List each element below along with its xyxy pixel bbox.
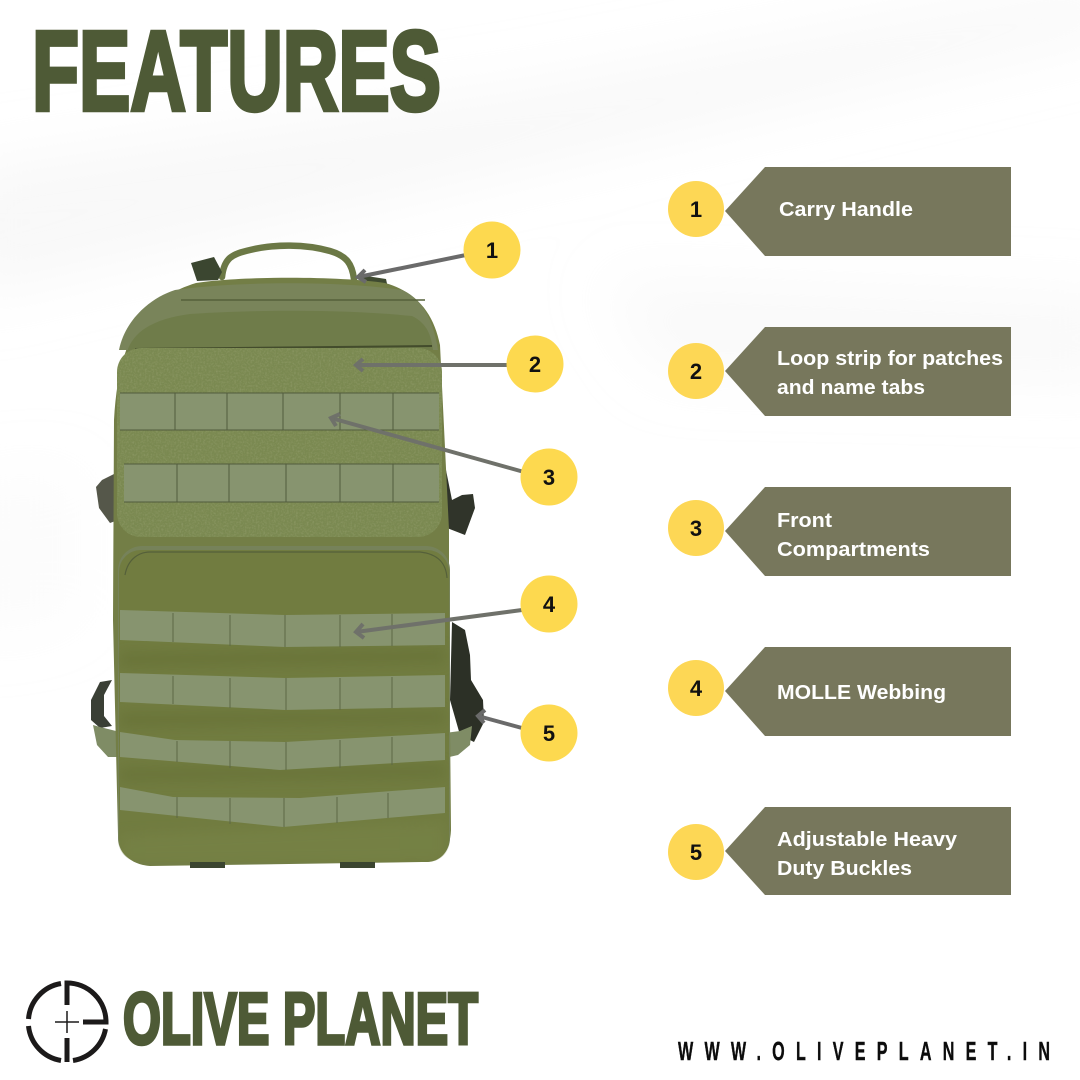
side buckles and straps [91, 470, 484, 758]
marker 1 on backpack: 1 [486, 238, 498, 263]
marker 2 on backpack [506, 336, 564, 392]
marker 5 on backpack: 5 [543, 721, 555, 746]
feature 1: carry handle: 1 [690, 197, 702, 222]
feature 2: loop strip: and name tabs [777, 377, 925, 399]
feature 5: buckles: 5 [690, 840, 702, 865]
website url: WWW.OLIVEPLANET.IN [678, 1036, 1050, 1066]
title: FEATURES [32, 8, 441, 134]
feature 2: loop strip [668, 327, 1011, 416]
feature 2: loop strip: Loop strip for patches [777, 348, 1003, 370]
MOLLE webbing strips [120, 610, 445, 827]
arrow 4 [356, 610, 522, 638]
marker 5 on backpack [520, 704, 578, 762]
feature 5: buckles: Adjustable Heavy [777, 829, 958, 851]
top compartment [119, 283, 438, 352]
arrow 3 [331, 414, 524, 472]
lower webbing row [124, 464, 439, 502]
feature 4: MOLLE webbing: 4 [690, 676, 703, 701]
feature 5: buckles: Duty Buckles [777, 858, 912, 880]
logo icon: crosshair [28, 983, 106, 1062]
feature 4: MOLLE webbing [668, 647, 1011, 736]
feature 1: carry handle: Carry Handle [779, 199, 913, 221]
upper webbing row [120, 393, 439, 430]
backpack body [113, 278, 451, 866]
feature 3: front compartments: Front [777, 510, 832, 532]
marker 4 on backpack [520, 576, 578, 632]
feature 2: loop strip: 2 [690, 359, 702, 384]
marker 2 on backpack: 2 [529, 352, 541, 377]
arrow 5 [478, 710, 522, 728]
front loop panel [117, 348, 442, 537]
marker 4 on backpack: 4 [543, 592, 556, 617]
logo wordmark: OLIVE PLANET [123, 979, 478, 1060]
feature 4: MOLLE webbing: MOLLE Webbing [777, 682, 946, 704]
arrow 1 [358, 255, 466, 282]
marker 3 on backpack [520, 448, 578, 506]
backpack illustration [91, 246, 484, 868]
feature 1: carry handle [668, 167, 1011, 256]
lower compartment [118, 546, 450, 868]
bottom feet [190, 862, 375, 868]
arrow 2 [356, 359, 507, 371]
feature 3: front compartments: Compartments [777, 539, 930, 561]
carry handle [191, 246, 388, 288]
marker 1 on backpack [464, 222, 520, 278]
feature 3: front compartments [668, 487, 1011, 576]
marker 3 on backpack: 3 [543, 465, 555, 490]
feature 3: front compartments: 3 [690, 516, 702, 541]
feature 5: buckles [668, 807, 1011, 895]
